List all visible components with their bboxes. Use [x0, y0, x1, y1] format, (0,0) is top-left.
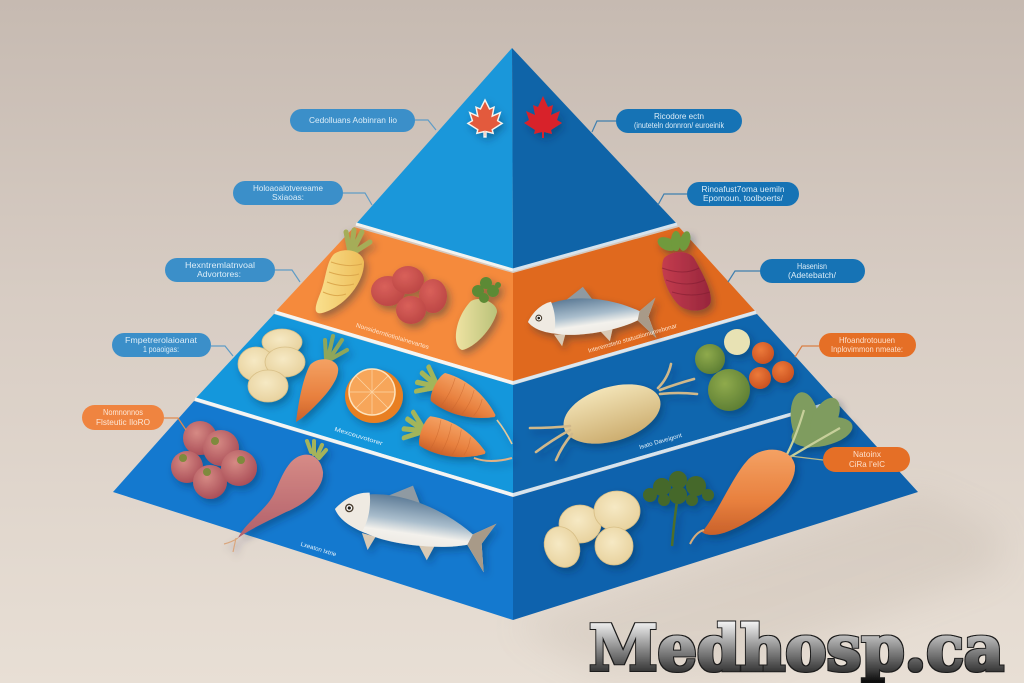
callout: right 3	[728, 259, 865, 283]
pyramid orange tier	[276, 227, 755, 381]
food: parsley	[643, 471, 714, 546]
callout: left 2: Sxiaoas:	[272, 192, 304, 202]
callout: right 4 orange: Inplovimmon nmeate:	[831, 344, 903, 354]
food: large parsnip	[530, 364, 697, 460]
callout: right 2: Epomoun, toolboerts/	[703, 193, 784, 203]
food: large carrot with leaves	[690, 390, 855, 544]
callout: right 5 orange: Natoinx	[853, 449, 882, 459]
callout: right 1: (inuteteln donnron/ euroeinik	[634, 120, 725, 130]
callout: right 1	[592, 109, 742, 133]
food: pale carrot	[456, 277, 501, 350]
pyramid bottom tier	[113, 401, 918, 620]
callout: left 2	[233, 181, 372, 205]
callout: right 2	[658, 182, 799, 206]
callout: right 1: Ricodore ectn	[654, 111, 704, 121]
icon: maple leaf left	[468, 100, 502, 137]
food: potato slices	[238, 329, 305, 402]
food: fish on orange tier	[524, 277, 661, 355]
callout: left 2: Holoaoalotvereame	[253, 183, 323, 193]
callout: left 5 orange	[82, 405, 186, 430]
callout: right 5 orange: CiRa I'eIC	[849, 459, 885, 469]
tier caption: orange left: Nonsiderntiotiolainevartes	[355, 323, 430, 351]
callout: left 4: Fmpetrerolaioanat	[125, 335, 198, 345]
callout: left 1: Cedolluans Aobinran Iio	[309, 115, 397, 125]
callout: left 3: Hexntremlatnvoal	[185, 260, 255, 270]
food: bottom right slices	[538, 491, 640, 573]
tier caption: bottom left: Lxeaton Ixtrie	[300, 542, 338, 559]
watermark: Medhosp.ca	[589, 611, 1004, 683]
food: pink root	[224, 441, 326, 552]
icon: maple leaf right	[524, 96, 562, 138]
callout: left 1	[290, 109, 436, 132]
pyramid middle tier	[196, 314, 835, 493]
food: fish on bottom tier	[329, 475, 500, 573]
food: orange half	[345, 369, 403, 423]
food: radishes	[171, 421, 257, 499]
callout: right 4 orange: Hfoandrotouuen	[839, 335, 895, 345]
food: yellow carrot	[316, 230, 370, 313]
callout: right 4 orange	[795, 333, 916, 357]
callout: left 3: Advortores:	[197, 269, 241, 279]
pyramid top tier	[356, 48, 677, 270]
callout: left 4: 1 poaoigas:	[143, 344, 179, 354]
food: beet	[655, 230, 711, 311]
callout: left 3	[165, 258, 300, 282]
callout: left 5 orange: Nomnonnos	[103, 407, 143, 417]
callout: left 5 orange: Flsteutic IloRO	[96, 417, 150, 427]
tier caption: orange right: Interemsteto statustiomunrebonar	[588, 323, 678, 355]
callout: right 5 orange	[790, 447, 910, 472]
callout: left 4	[112, 333, 233, 357]
callout: right 3: (Adetebatch/	[788, 270, 837, 280]
food: meat pieces	[371, 266, 447, 324]
callout: right 2: Rinoafust7oma uemiln	[702, 184, 785, 194]
pyramid	[113, 48, 918, 620]
callout: right 3: Hasenisn	[797, 261, 827, 271]
food: orange-tier carrot	[296, 336, 347, 422]
food: carrot upper right of middle tier	[412, 362, 512, 444]
food: greens and small orange vegetables	[695, 329, 794, 411]
tier caption: middle left: Mexceuvotorer	[334, 427, 383, 447]
tier caption: middle right: Isato Daveigont	[639, 433, 683, 451]
food: carrot lower	[400, 408, 512, 469]
